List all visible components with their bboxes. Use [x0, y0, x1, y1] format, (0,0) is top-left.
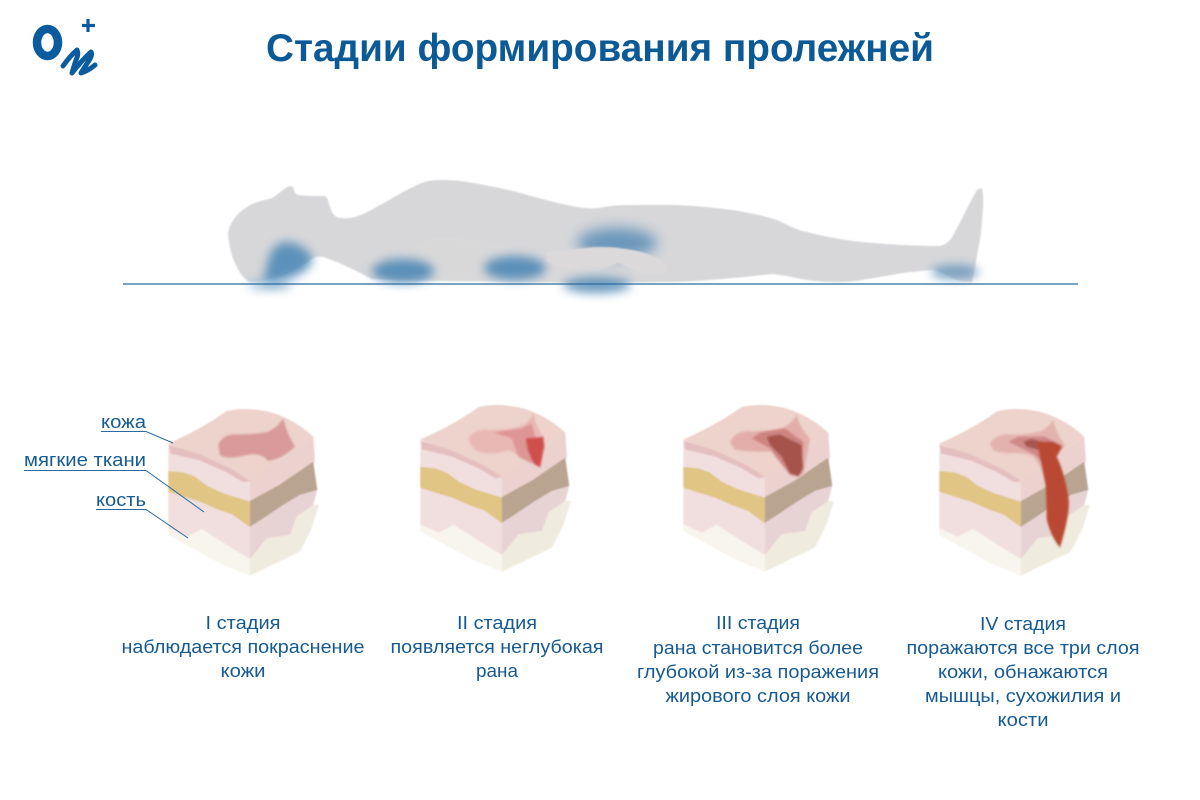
title: Стадии формирования пролежней	[266, 27, 934, 70]
label: мягкие ткани: мягкие ткани	[24, 449, 146, 470]
caption: stage III: III стадия	[716, 612, 800, 633]
body outline	[228, 180, 983, 283]
caption: stage IV: поражаются все три слоя	[906, 637, 1140, 658]
label: кость: кость	[96, 489, 146, 510]
wound: stage I	[218, 418, 295, 461]
caption: stage III: рана становится более	[653, 637, 863, 658]
caption: stage II: появляется неглубокая	[390, 636, 604, 657]
caption: stage III	[637, 612, 879, 706]
caption: stage IV: кости	[998, 709, 1048, 730]
logo	[37, 19, 95, 73]
pressure point: sacrum	[563, 277, 631, 293]
floor line	[123, 283, 1078, 285]
tissue block: stage III	[683, 405, 834, 572]
caption: stage I	[122, 612, 364, 681]
caption: stage I: наблюдается покраснение	[122, 636, 364, 657]
caption: stage II	[390, 612, 604, 681]
caption: stage II: II стадия	[457, 612, 537, 633]
pressure point: head	[264, 242, 312, 283]
caption: stage III: глубокой из-за поражения	[637, 661, 879, 682]
pressure point: back	[372, 259, 434, 283]
pressure point: head shadow	[248, 280, 292, 290]
label: кожа: кожа	[101, 411, 147, 432]
tissue block: stage IV	[939, 409, 1090, 576]
caption: stage II: рана	[476, 660, 519, 681]
caption: stage IV: мышцы, сухожилия и	[925, 685, 1121, 706]
body silhouette with pressure points	[123, 180, 1078, 293]
wound: stage II	[468, 413, 544, 468]
caption: stage IV	[906, 613, 1140, 730]
forearm and hand	[547, 247, 668, 273]
caption: stage IV: IV стадия	[980, 613, 1066, 634]
tissue block: stage II	[420, 405, 571, 572]
caption: stage III: жирового слоя кожи	[666, 685, 850, 706]
pressure point: heel	[931, 265, 979, 279]
caption: stage I: кожи	[220, 660, 266, 681]
pressure point: elbow	[484, 256, 546, 280]
caption: stage I: I стадия	[206, 612, 280, 633]
wound: stage IV	[990, 420, 1069, 548]
pressure point: hip upper	[577, 228, 657, 258]
label: кожа	[101, 411, 173, 443]
label: кость	[96, 489, 188, 538]
lower arm area	[394, 238, 600, 282]
tissue block: stage I	[168, 409, 319, 576]
wound: stage III	[730, 415, 810, 477]
caption: stage IV: кожи, обнажаются	[938, 661, 1108, 682]
label: мягкие ткани	[24, 449, 204, 512]
